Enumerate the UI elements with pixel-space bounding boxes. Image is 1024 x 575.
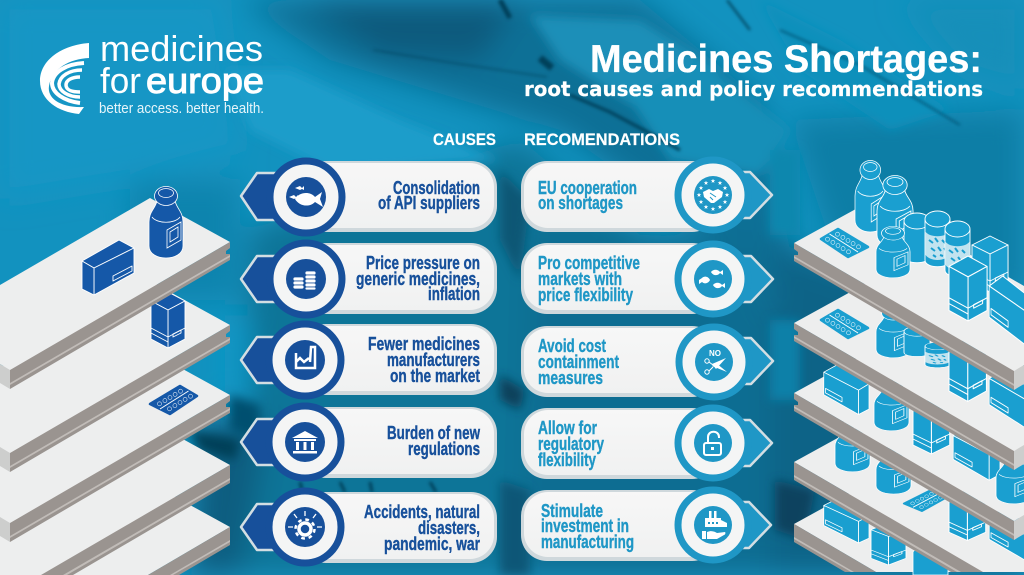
cause 5 text: pandemic, war (384, 533, 480, 554)
shelf 3 left with blister pack (0, 351, 230, 542)
icon: factory (296, 347, 315, 368)
cause 3 text (368, 333, 480, 386)
panel: recommendation 4 (521, 408, 772, 479)
logo wordmark: medicines (100, 28, 263, 69)
icon: institution building (292, 431, 318, 454)
recommendation 2 text (538, 252, 640, 305)
panel: cause 5 (241, 491, 497, 563)
shelf 1 right (794, 160, 1024, 390)
logo: medicines for europe: for (100, 60, 141, 101)
recommendation 4 text: flexibility (538, 449, 597, 470)
cause 5 text: Accidents, natural (364, 501, 480, 522)
shelf 1 left with bottle and box (0, 186, 230, 389)
cause 2 text: generic medicines, (356, 268, 480, 289)
recommendation 1 text: on shortages (538, 192, 623, 213)
recommendation 4 text: regulatory (538, 433, 605, 454)
recommendation 4 text: Allow for (538, 417, 597, 438)
cause 2 text (356, 252, 480, 304)
panel: recommendation 2 (521, 243, 773, 314)
recommendation 1 text (538, 177, 637, 213)
icon: coin stacks (293, 271, 316, 290)
recommendation 2 text: Pro competitive (538, 252, 640, 273)
icon: gear with warning rays (288, 511, 322, 538)
shelf 4 right (794, 418, 1024, 572)
recommendation 3 text: measures (538, 367, 603, 388)
cause 1 text (378, 177, 480, 213)
shelf 2 left with tall box (0, 281, 230, 472)
recommendation 3 text (538, 335, 619, 388)
panel: recommendation 5 (521, 490, 771, 561)
recommendation 2 text: markets with (538, 268, 622, 289)
cause 4 text: Burden of new (387, 422, 480, 443)
recommendation 3 text: Avoid cost (538, 335, 606, 356)
recommendation 5 text: Stimulate (541, 500, 603, 521)
recommendation 1 text: EU cooperation (538, 177, 637, 198)
cause 2 text: inflation (428, 283, 480, 304)
heading: recommendations: RECOMENDATIONS (524, 130, 680, 149)
panel: cause 3 (241, 324, 497, 396)
logo: medicines for europe: europe (146, 60, 264, 101)
shelf 2 right (794, 279, 1024, 470)
cause 2 text: Price pressure on (366, 252, 480, 273)
cause 3 text: on the market (390, 365, 480, 386)
title: root causes and policy recommendations (524, 77, 983, 101)
icon: no scissors (705, 349, 727, 374)
shelf 4 left (0, 421, 230, 575)
cause 1 text: of API suppliers (378, 192, 480, 213)
cause 1 text: Consolidation (393, 177, 480, 198)
icon: EU stars and handshake (697, 179, 729, 211)
shelf 5 right (794, 480, 1024, 575)
recommendation 5 text: investment in (541, 515, 629, 536)
logo: medicines for europe (40, 28, 264, 117)
recommendation 4 text (538, 417, 605, 470)
cause 5 text: disasters, (418, 517, 480, 538)
cause 4 text: regulations (408, 438, 480, 459)
shelf 3 right (794, 349, 1024, 540)
shelf 5 left (0, 483, 230, 575)
panel: cause 1 (241, 161, 497, 233)
cause 5 text (364, 501, 480, 554)
recommendation 3 text: containment (538, 351, 619, 372)
title: Medicines Shortages: (590, 38, 982, 81)
icon: no scissors: NO (709, 349, 721, 358)
heading: causes: CAUSES (433, 130, 496, 149)
panel: recommendation 3 (521, 326, 773, 397)
recommendation 5 text (541, 500, 634, 552)
cause 4 text (387, 422, 480, 459)
panel: recommendation 1 (521, 160, 772, 232)
recommendation 5 text: manufacturing (541, 531, 634, 552)
panel: cause 2 (241, 243, 497, 315)
icon: big fish eats small fish (289, 186, 323, 207)
right shelves full of medicines (794, 160, 1024, 575)
logo tagline: better access. better health. (99, 101, 264, 117)
left shelves with remaining medicines (0, 186, 230, 575)
icon: three fish (699, 270, 725, 288)
title (524, 38, 983, 101)
icon: factory on open hand (702, 511, 727, 539)
icon: open padlock (704, 432, 721, 455)
cause 3 text: Fewer medicines (368, 333, 480, 354)
recommendation 2 text: price flexibility (538, 284, 634, 305)
panel: cause 4 (241, 406, 497, 478)
logo mark (40, 43, 89, 114)
cause 3 text: manufacturers (387, 349, 480, 370)
